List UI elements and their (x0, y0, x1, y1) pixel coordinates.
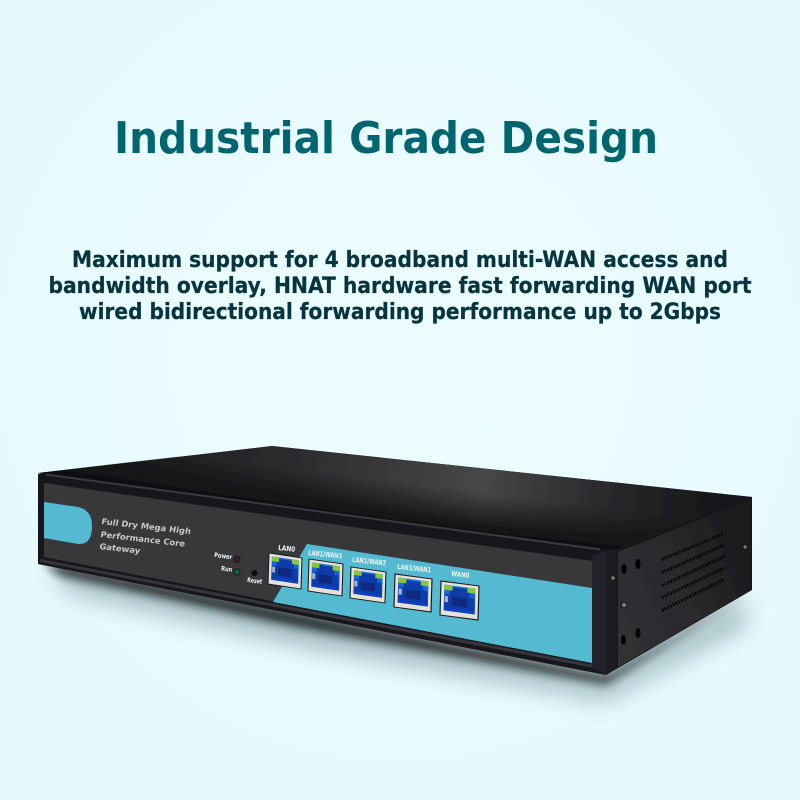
port LAN1/WAN3 (308, 559, 343, 596)
front bottom bevel (40, 559, 600, 669)
port LAN2/WAN2 (350, 567, 386, 603)
teal badge (44, 502, 92, 544)
front top bevel highlight (46, 474, 600, 550)
device shadow (44, 562, 750, 700)
corner screw (611, 576, 615, 580)
front face frame (38, 474, 607, 675)
indicator labels (214, 551, 263, 586)
front corner (592, 551, 606, 675)
product name (99, 516, 192, 556)
indicator labels: Reset (247, 576, 263, 586)
port labels: LAN0 (278, 543, 296, 554)
side mounting holes (621, 559, 641, 645)
port LAN0 (268, 553, 302, 589)
description text: Maximum support for 4 broadband multi-WAN access and (72, 248, 728, 273)
title: Industrial Grade Design (114, 113, 658, 164)
top face front-edge shading (38, 456, 700, 549)
run LED (234, 569, 240, 575)
front panel (44, 483, 592, 663)
top face (38, 446, 752, 549)
port WAN0 (440, 581, 479, 620)
description text (48, 248, 752, 325)
port labels: LAN2/WAN2 (352, 555, 387, 568)
device silhouette (38, 446, 752, 675)
port LAN3/WAN1 (394, 574, 432, 612)
port labels (278, 543, 470, 580)
power LED (234, 556, 240, 562)
side screws (621, 545, 747, 608)
description text: wired bidirectional forwarding performance up to 2Gbps (79, 300, 721, 325)
port labels: LAN1/WAN3 (308, 548, 343, 561)
product name: Gateway (99, 541, 142, 556)
router device (38, 446, 752, 675)
reset button (252, 570, 258, 576)
port labels: LAN3/WAN1 (397, 562, 432, 575)
product name: Performance Core (100, 529, 186, 549)
product name: Full Dry Mega High (101, 516, 192, 536)
side panel (618, 499, 751, 667)
indicator labels: Power (214, 551, 233, 561)
indicator labels: Run (221, 565, 233, 574)
description text: bandwidth overlay, HNAT hardware fast forwarding WAN port (48, 274, 752, 299)
port labels: WAN0 (451, 569, 470, 580)
side vent holes (662, 534, 724, 610)
teal port band (273, 544, 592, 663)
